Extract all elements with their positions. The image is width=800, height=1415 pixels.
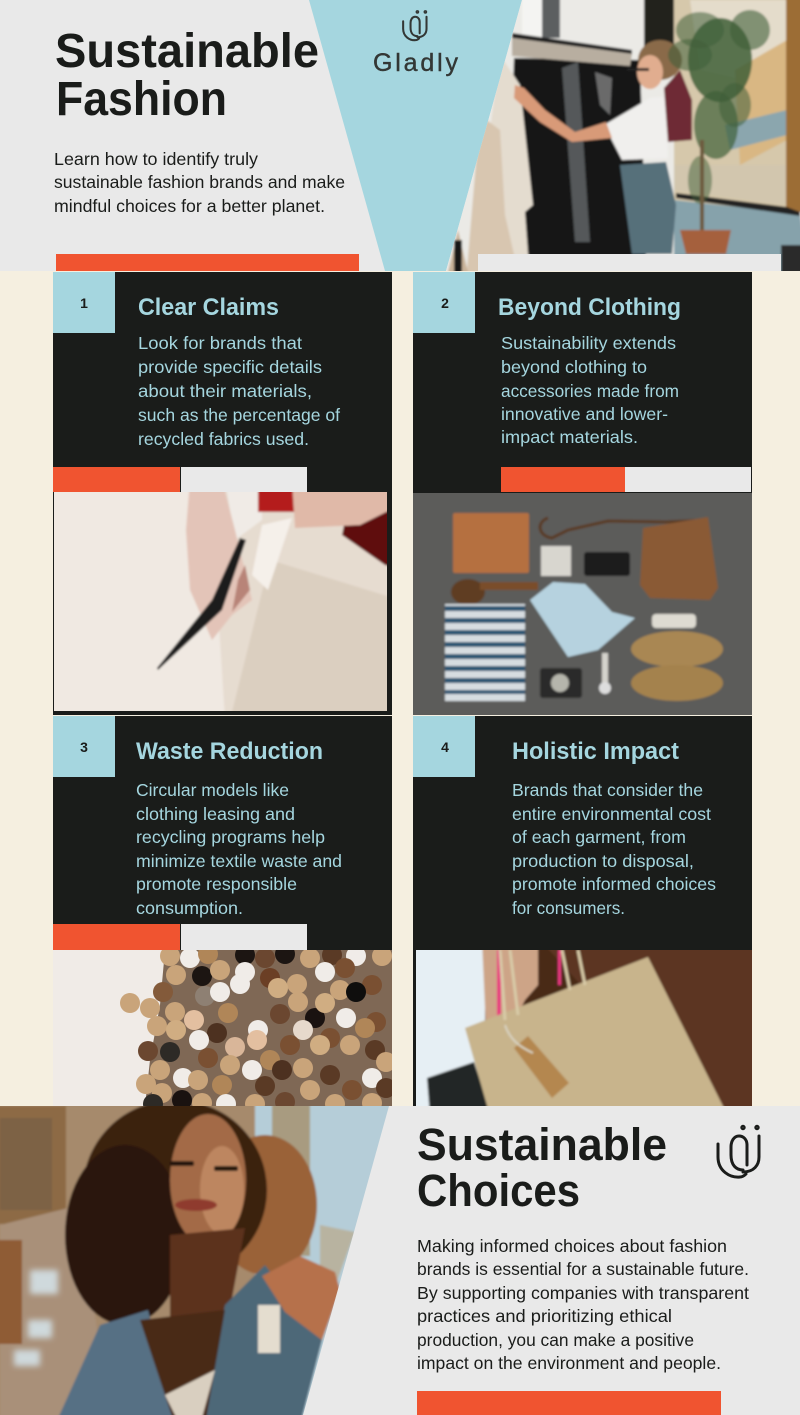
body text: recycling programs help xyxy=(136,827,325,847)
body text: minimize textile waste and xyxy=(136,851,342,871)
closing text: Making informed choices about fashion xyxy=(417,1236,727,1256)
body text: production to disposal, xyxy=(512,851,694,871)
brand logo: Gladly: Gladly xyxy=(373,49,458,77)
photo: flat lay of accessories xyxy=(413,493,752,715)
header panel xyxy=(0,0,800,281)
number badge 4 xyxy=(413,716,475,777)
body text: accessories made from xyxy=(501,381,679,401)
heading: Holistic Impact xyxy=(512,738,679,765)
clothes xyxy=(512,56,647,254)
panel: card 2 beyond clothing xyxy=(413,272,752,715)
accent bars xyxy=(501,467,751,492)
photo: smiling woman in denim jacket xyxy=(0,1096,400,1415)
photo: scattered wooden buttons xyxy=(120,950,392,1106)
body text: clothing leasing and xyxy=(136,804,295,824)
body text: Sustainability extends xyxy=(501,333,676,353)
number badge 4: 4 xyxy=(441,739,449,755)
photo: paper shopping bag xyxy=(416,950,752,1106)
body text: promote informed choices xyxy=(512,874,716,894)
intro text: mindful choices for a better planet. xyxy=(54,196,325,216)
heading: Clear Claims xyxy=(138,294,279,321)
closing text: impact on the environment and people. xyxy=(417,1353,721,1373)
body text: consumption. xyxy=(136,898,243,918)
closing heading: Choices xyxy=(417,1165,580,1216)
body text: promote responsible xyxy=(136,874,297,894)
closing heading: Sustainable xyxy=(417,1119,667,1170)
number badge 1: 1 xyxy=(80,295,88,311)
intro text: Learn how to identify truly xyxy=(54,149,258,169)
woman xyxy=(620,162,676,254)
teal wedge xyxy=(309,0,522,271)
decorative bars xyxy=(56,254,359,271)
number badge 3 xyxy=(53,716,115,777)
body text: Brands that consider the xyxy=(512,780,703,800)
body text: for consumers. xyxy=(512,898,625,918)
closing text: brands is essential for a sustainable future. xyxy=(417,1259,749,1279)
body text: innovative and lower- xyxy=(501,404,668,424)
panel: card 1 clear claims xyxy=(40,272,400,725)
number badge 1 xyxy=(53,272,115,333)
number badge 2: 2 xyxy=(441,295,449,311)
panel: card 3 waste reduction xyxy=(53,716,392,950)
body text xyxy=(138,333,340,449)
body text xyxy=(501,333,679,447)
closing text xyxy=(417,1236,749,1373)
number badge 2 xyxy=(413,272,475,333)
body text: recycled fabrics used. xyxy=(138,429,309,449)
title: Sustainable xyxy=(55,25,319,78)
intro text: sustainable fashion brands and make xyxy=(54,172,345,192)
header photo: woman browsing a clothing rack xyxy=(430,0,800,281)
closing heading xyxy=(417,1119,667,1216)
title xyxy=(55,25,319,126)
body text: entire environmental cost xyxy=(512,804,711,824)
number badge 3: 3 xyxy=(80,739,88,755)
body text: Look for brands that xyxy=(138,333,302,353)
icon: brand mark xyxy=(718,1126,759,1177)
plant xyxy=(668,10,770,204)
panel: card 4 holistic impact xyxy=(405,716,765,1116)
heading: Waste Reduction xyxy=(136,738,323,765)
body text: Circular models like xyxy=(136,780,289,800)
panel: footer xyxy=(0,1096,800,1415)
accent bars xyxy=(53,924,307,950)
body text: impact materials. xyxy=(501,427,638,447)
title: Fashion xyxy=(56,73,227,126)
heading: Beyond Clothing xyxy=(498,294,681,321)
body text: provide specific details xyxy=(138,357,322,377)
body text: such as the percentage of xyxy=(138,405,340,425)
accent bars xyxy=(53,467,307,492)
body text: about their materials, xyxy=(138,381,312,401)
body text xyxy=(136,780,342,918)
closing text: practices and prioritizing ethical xyxy=(417,1306,672,1326)
closing text: production, you can make a positive xyxy=(417,1330,694,1350)
body text: beyond clothing to xyxy=(501,357,647,377)
body text: of each garment, from xyxy=(512,827,686,847)
intro text xyxy=(54,149,345,216)
closing text: By supporting companies with transparent xyxy=(417,1283,749,1303)
body text xyxy=(512,780,716,918)
decorative bar xyxy=(417,1391,721,1415)
photo: scissors cutting fabric xyxy=(54,492,387,711)
brand logo: Gladly xyxy=(373,11,458,77)
